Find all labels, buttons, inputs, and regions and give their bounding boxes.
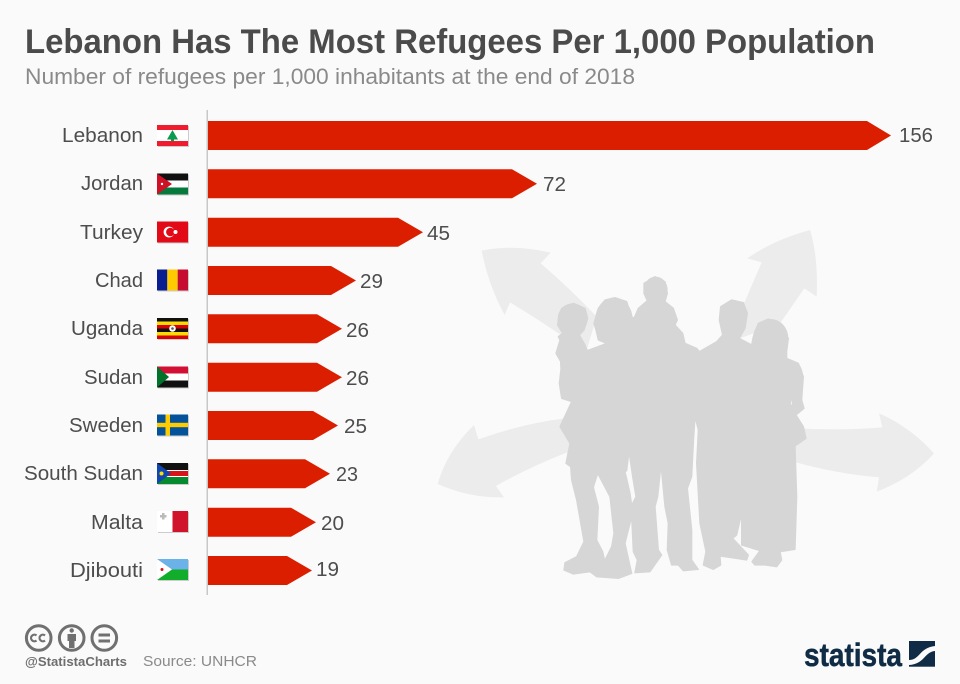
row: Sudan: 26 — [346, 367, 369, 390]
logo: statista: statista — [804, 637, 902, 673]
row: Turkey: 45 — [427, 222, 450, 245]
row: Uganda — [71, 314, 369, 343]
row: Uganda: Uganda — [71, 317, 144, 340]
row: Jordan: Jordan — [81, 172, 143, 195]
row: Sweden — [69, 411, 367, 440]
row: Malta: 20 — [321, 512, 344, 535]
subtitle: Number of refugees per 1,000 inhabitants at the end of 2018 — [25, 64, 635, 89]
row: Chad: Chad — [95, 269, 143, 292]
row: Sweden: Sweden — [69, 414, 143, 437]
row: Sudan: Sudan — [84, 366, 143, 389]
row: Jordan — [81, 169, 566, 198]
row: South Sudan: South Sudan — [24, 462, 143, 485]
arrow: top right — [740, 230, 817, 338]
row: Lebanon: Lebanon — [62, 124, 143, 147]
row: Uganda: 26 — [346, 319, 369, 342]
row: Djibouti — [70, 556, 339, 585]
icon: creative commons licence — [26, 626, 117, 650]
bar chart — [24, 121, 933, 585]
row: Lebanon: 156 — [899, 124, 933, 147]
row: Sweden: 25 — [344, 415, 367, 438]
row: Chad: 29 — [360, 270, 383, 293]
arrow: left — [438, 418, 572, 497]
axis line — [206, 110, 208, 595]
row: Malta: Malta — [91, 511, 144, 534]
row: Turkey: Turkey — [80, 221, 144, 244]
arrow: right — [793, 413, 934, 492]
row: South Sudan — [24, 459, 358, 488]
credit: @StatistaCharts — [25, 655, 127, 669]
row: Sudan — [84, 363, 369, 392]
background illustration: arrows and family silhouette — [438, 230, 934, 578]
row: South Sudan: 23 — [336, 463, 358, 486]
arrow: top left — [482, 248, 597, 350]
row: Turkey — [80, 218, 450, 247]
row: Djibouti: Djibouti — [70, 559, 143, 582]
row: Malta — [91, 508, 344, 537]
source: Source: UNHCR — [143, 653, 257, 670]
row: Lebanon — [62, 121, 933, 150]
row: Jordan: 72 — [543, 173, 566, 196]
row: Djibouti: 19 — [316, 558, 339, 581]
row: Chad — [95, 266, 383, 295]
family silhouette — [556, 277, 806, 578]
title: Lebanon Has The Most Refugees Per 1,000 Population — [25, 23, 875, 61]
